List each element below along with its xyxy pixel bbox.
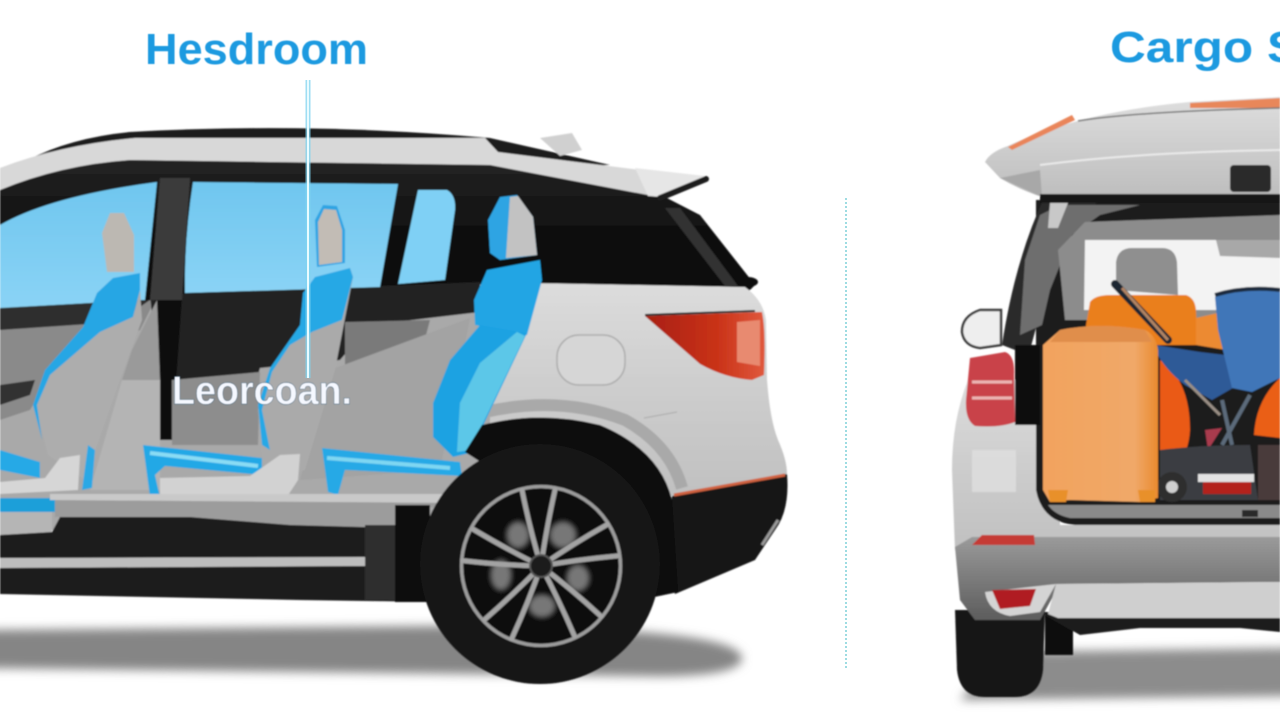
rear seat, blue highlighted: [322, 195, 542, 495]
luggage: back orange cases: [1086, 295, 1280, 480]
left tail light: [966, 352, 1015, 426]
dotted divider: [845, 198, 847, 668]
wheel spokes: [463, 490, 618, 639]
headroom measure line: [306, 80, 310, 378]
cargo opening: [1036, 200, 1280, 525]
rear seat headrest: [1116, 248, 1178, 295]
luggage: large orange suitcase: [1043, 326, 1158, 502]
ground shadow under side view: [0, 626, 742, 676]
luggage: stroller: [1115, 284, 1280, 502]
ground shadow under rear view: [960, 648, 1280, 700]
sill and rocker panel: [0, 494, 470, 602]
tail light: [645, 311, 765, 380]
underbody: [1040, 612, 1280, 635]
wheel arch: [465, 418, 678, 600]
cargo sill: [1048, 505, 1280, 518]
middle seat: [143, 205, 353, 500]
panel: side view of SUV interior: [0, 128, 788, 684]
rear body: [952, 380, 1280, 550]
heading: cargo space label: Cargo S: [1110, 23, 1280, 72]
fuel door: [557, 335, 625, 385]
legroom label: Leorcoan.: [172, 369, 352, 413]
front seat: [0, 213, 142, 512]
lower bumper: [955, 535, 1280, 620]
brake disc glimpses: [490, 521, 590, 618]
interior headliner and rear window: [1058, 215, 1280, 320]
heading: headroom label: Hesdroom: [145, 25, 368, 74]
door pillar and frame: [1002, 198, 1140, 425]
panel: rear view of SUV with cargo: [952, 97, 1280, 700]
mirror: [962, 310, 1001, 348]
rear bumper and orange trim: [668, 474, 788, 594]
left rear tyre: [955, 610, 1045, 697]
car body shell: [0, 128, 787, 496]
interior lower panels: [0, 178, 490, 530]
side windows: [0, 182, 455, 308]
rear wheel: [420, 444, 660, 684]
tailgate: [985, 97, 1280, 203]
